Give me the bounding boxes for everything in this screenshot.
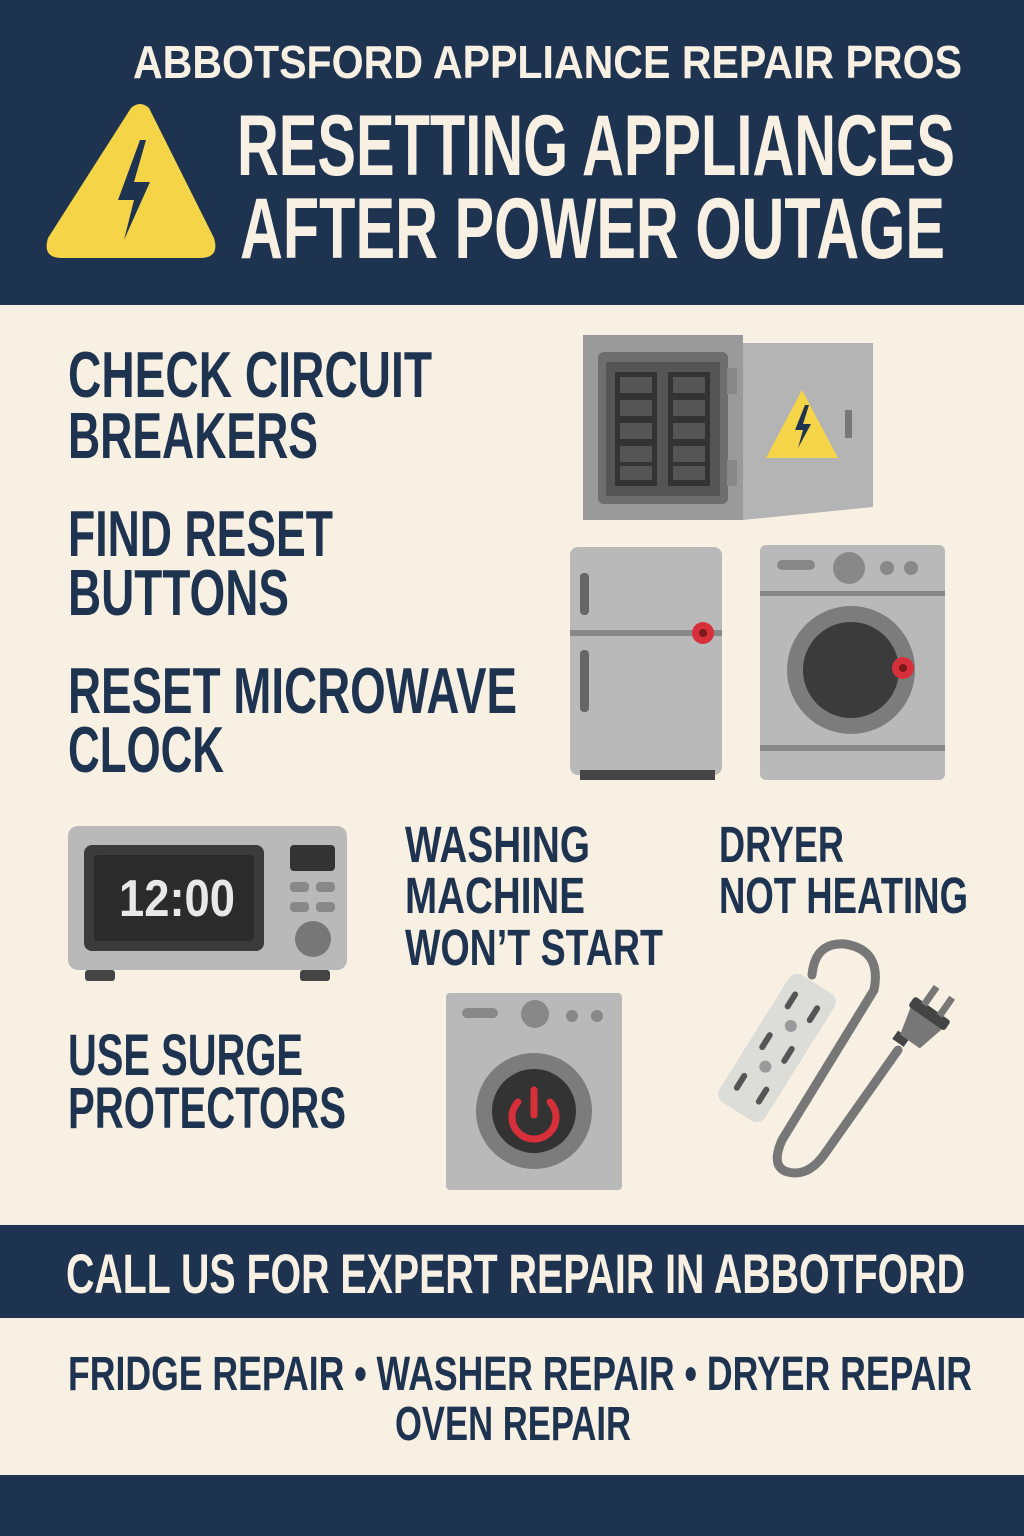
text: washing machine won't start: WON’T START bbox=[405, 919, 663, 976]
icon: microwave bbox=[68, 826, 347, 981]
step: use surge protectors: USE SURGE bbox=[68, 1023, 303, 1088]
text: dryer not heating bbox=[719, 816, 968, 924]
step: reset microwave clock: RESET MICROWAVE bbox=[68, 654, 517, 727]
text: dryer not heating: DRYER bbox=[719, 816, 844, 873]
icon: breaker panel bbox=[583, 335, 873, 520]
icon: surge protector power strip bbox=[714, 944, 962, 1173]
services list: OVEN REPAIR bbox=[395, 1398, 631, 1451]
step: find reset buttons: FIND RESET bbox=[68, 497, 333, 570]
text: washing machine won't start: WASHING bbox=[405, 816, 590, 873]
icon: washing machine bbox=[760, 545, 945, 780]
step: reset microwave clock bbox=[68, 654, 517, 786]
step: check circuit breakers bbox=[68, 338, 432, 472]
step: use surge protectors: PROTECTORS bbox=[68, 1076, 346, 1141]
step: check circuit breakers: CHECK CIRCUIT bbox=[68, 338, 432, 411]
step: find reset buttons bbox=[68, 497, 333, 629]
step: find reset buttons: BUTTONS bbox=[68, 556, 289, 629]
icon: fridge bbox=[570, 547, 722, 780]
services list bbox=[68, 1348, 972, 1451]
step: check circuit breakers: BREAKERS bbox=[68, 399, 318, 472]
title bbox=[237, 98, 955, 277]
text: washing machine won't start: MACHINE bbox=[405, 867, 585, 924]
text: washing machine won't start bbox=[405, 816, 663, 976]
call to action band bbox=[0, 1225, 1024, 1318]
step: use surge protectors bbox=[68, 1023, 346, 1141]
icon: washer with power button bbox=[446, 993, 622, 1190]
footer band bbox=[0, 1475, 1024, 1536]
icon: microwave: 12:00 bbox=[119, 870, 235, 928]
icon: warning triangle bbox=[47, 104, 215, 258]
step: reset microwave clock: CLOCK bbox=[68, 713, 224, 786]
header band bbox=[0, 0, 1024, 305]
